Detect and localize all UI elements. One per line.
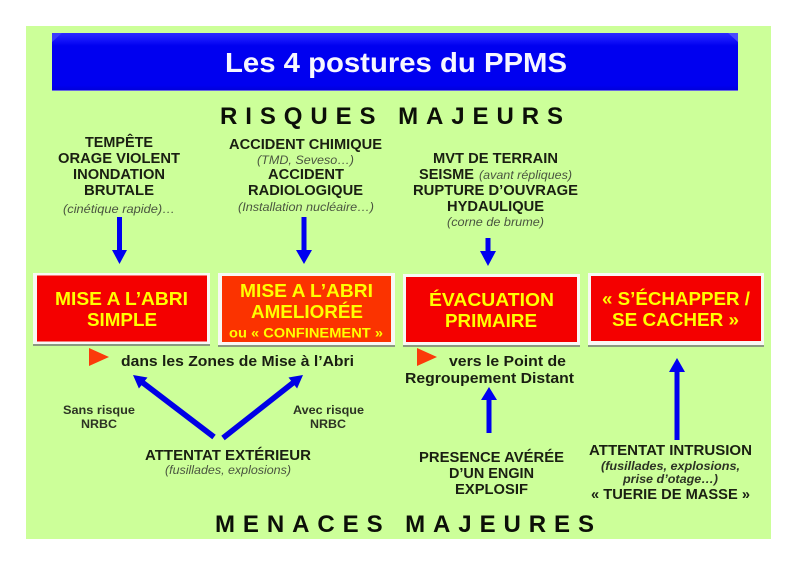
arrow: down to box 3	[480, 238, 496, 266]
heading: menaces majeures: MENACES MAJEURES	[215, 511, 594, 538]
panel: s'echapper se cacher	[588, 273, 764, 347]
text block: risks column 3	[413, 151, 578, 229]
text: attentat intrusion: (fusillades, explosions,	[601, 461, 740, 473]
text block: risks column 3: HYDAULIQUE	[447, 199, 544, 215]
text: avec risque nrbc	[293, 405, 364, 431]
text block: technological risks column 2: ACCIDENT CHIMIQUE	[229, 137, 382, 153]
text block: natural risks column 1: TEMPÊTE	[85, 133, 153, 151]
text: avec risque nrbc: Avec risque	[293, 405, 364, 417]
text: avec risque nrbc: NRBC	[310, 419, 346, 431]
text block: natural risks column 1: (cinétique rapide)…	[63, 204, 175, 216]
text: presence engin explosif: PRESENCE AVÉRÉE	[419, 449, 564, 466]
text: attentat exterieur: (fusillades, explosions)	[165, 465, 291, 477]
text block: natural risks column 1	[58, 133, 180, 216]
text: vers le point de regroupement: Regroupement Distant	[405, 371, 574, 387]
arrow: diagonal to zones right	[221, 375, 303, 440]
text: attentat intrusion: ATTENTAT INTRUSION	[589, 443, 752, 459]
text: vers le point de regroupement	[405, 354, 574, 387]
text block: risks column 3: (corne de brume)	[447, 217, 544, 229]
text: attentat exterieur	[145, 447, 312, 477]
panel: evacuation primaire: PRIMAIRE	[445, 311, 537, 331]
panel: mise a l'abri amelioree: AMELIORÉE	[251, 301, 363, 322]
panel: mise a l'abri simple: MISE A L’ABRI	[55, 289, 188, 309]
arrow: down to box 1	[112, 217, 127, 264]
arrow: down to box 2	[296, 217, 312, 264]
icon: red triangle zones	[89, 348, 109, 366]
panel: mise a l'abri amelioree	[218, 273, 395, 347]
arrow: up to s'echapper	[669, 358, 685, 440]
panel: mise a l'abri simple: SIMPLE	[87, 310, 157, 330]
text: sans risque nrbc	[63, 405, 135, 431]
panel: s'echapper se cacher: « S’ÉCHAPPER /	[602, 288, 750, 309]
panel: evacuation primaire: ÉVACUATION	[429, 289, 554, 310]
text: attentat exterieur: ATTENTAT EXTÉRIEUR	[145, 447, 312, 464]
text block: technological risks column 2	[229, 137, 382, 214]
arrow: diagonal to zones left	[133, 375, 216, 439]
title banner	[52, 33, 738, 91]
arrow: up to regroupement	[481, 387, 497, 433]
text: attentat intrusion: « TUERIE DE MASSE »	[591, 487, 750, 503]
panel: s'echapper se cacher: SE CACHER »	[612, 310, 739, 330]
text block: natural risks column 1: BRUTALE	[84, 183, 154, 199]
text block: natural risks column 1: ORAGE VIOLENT	[58, 151, 180, 167]
text: attentat intrusion	[589, 443, 752, 503]
text block: risks column 3: MVT DE TERRAIN	[433, 151, 558, 167]
text block: risks column 3: (avant répliques)	[479, 170, 572, 182]
icon: red triangle point	[417, 348, 437, 366]
text: dans les zones: dans les Zones de Mise à l’Abri	[121, 354, 354, 370]
text block: technological risks column 2: (TMD, Seveso…)	[257, 155, 354, 167]
text: attentat intrusion: prise d’otage…)	[622, 474, 718, 486]
title text: Les 4 postures du PPMS	[225, 47, 567, 78]
text block: risks column 3: RUPTURE D’OUVRAGE	[413, 183, 578, 199]
text block: technological risks column 2: RADIOLOGIQUE	[248, 183, 363, 199]
text: presence engin explosif: D’UN ENGIN	[449, 466, 534, 482]
text block: risks column 3: SEISME	[419, 167, 474, 183]
panel: mise a l'abri amelioree: MISE A L’ABRI	[240, 281, 373, 301]
text block: natural risks column 1: INONDATION	[73, 167, 165, 183]
panel: evacuation primaire	[403, 274, 580, 347]
text: sans risque nrbc: NRBC	[81, 419, 117, 431]
panel: mise a l'abri amelioree: ou « CONFINEMENT »	[229, 324, 383, 340]
panel: mise a l'abri simple	[33, 273, 210, 346]
text: sans risque nrbc: Sans risque	[63, 405, 135, 417]
text: vers le point de regroupement: vers le Point de	[449, 354, 566, 370]
text: presence engin explosif: EXPLOSIF	[455, 482, 528, 498]
text: presence engin explosif	[419, 449, 564, 498]
heading: risques majeurs: RISQUES MAJEURS	[220, 103, 563, 130]
text block: technological risks column 2: (Installation nucléaire…)	[238, 202, 374, 214]
text block: technological risks column 2: ACCIDENT	[268, 167, 344, 183]
